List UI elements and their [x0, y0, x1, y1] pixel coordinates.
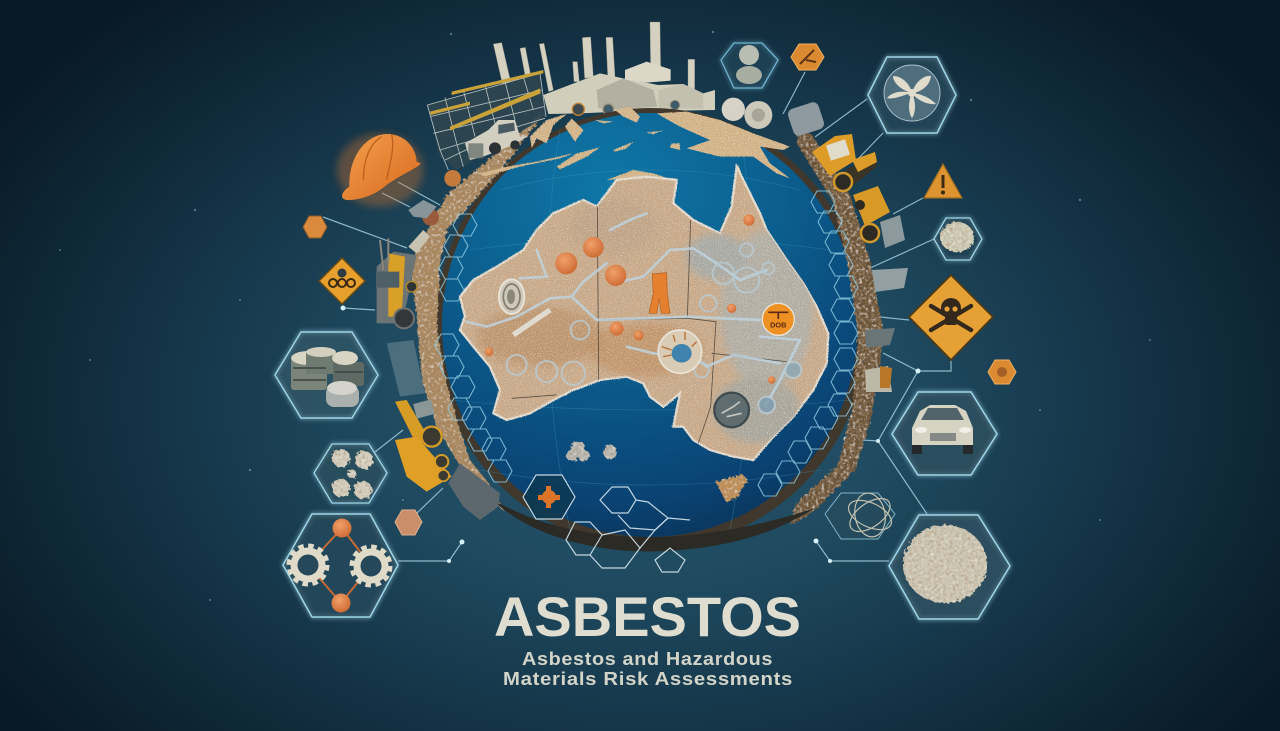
panel: atom-like fibre [825, 491, 896, 539]
icon: gear in bottom hexagon [538, 486, 560, 508]
globe [410, 108, 884, 572]
small hazard hexagon: right [988, 360, 1016, 384]
hexagon map rings [507, 243, 801, 413]
factory on the horizon [493, 22, 772, 129]
Australia landmass [460, 167, 828, 460]
left machinery [376, 170, 500, 520]
rim boulders [422, 209, 439, 226]
orange hazard badge: DOB [770, 321, 786, 330]
asbestos clumps in ocean [566, 441, 617, 462]
bottom hexagon cluster [523, 475, 690, 572]
sandy left rim [410, 112, 545, 512]
dump truck [853, 186, 890, 226]
globe rim [435, 108, 867, 548]
yellow loader top [812, 134, 856, 176]
right machinery [786, 101, 908, 392]
right hexagon mesh [758, 191, 858, 496]
grey machine block [448, 463, 500, 520]
excavator [395, 399, 452, 492]
ocean [442, 113, 858, 537]
panel: car [892, 392, 997, 475]
worker icon [649, 273, 670, 313]
state borders [512, 207, 787, 443]
white utility vehicle [465, 120, 528, 160]
orange fibre nodules [485, 214, 775, 384]
panel: fibre ball [934, 218, 982, 260]
skull and crossbones hazard sign [909, 275, 993, 360]
scaffolding [427, 70, 546, 170]
dark bottom rim [490, 498, 815, 551]
gas mask warning diamond [319, 258, 365, 304]
title: ASBESTOS [494, 585, 801, 648]
small hazard hexagon: top right [791, 44, 824, 70]
connector lines [323, 72, 951, 561]
orange hazard badge [762, 303, 794, 335]
panel: gears and nodes [283, 514, 398, 617]
title block [494, 585, 801, 689]
connector end dots [340, 306, 920, 563]
dark runner medallion [714, 393, 749, 427]
star specks [59, 31, 1151, 601]
yellow loader [376, 238, 417, 328]
panel: top face icon [721, 43, 778, 88]
map grid [450, 130, 850, 530]
panel: storage drums [275, 332, 378, 418]
subtitle line two: Materials Risk Assessments [503, 668, 793, 689]
brown right rim [790, 125, 884, 525]
hard hat [337, 133, 423, 207]
northern islands [480, 107, 790, 180]
small hazard hexagon: lower left [395, 510, 422, 535]
Tasmania [716, 474, 748, 502]
left hexagon mesh [435, 214, 512, 482]
subtitle line one: Asbestos and Hazardous [522, 648, 773, 669]
warning triangle [924, 164, 962, 198]
panel: fibre clusters [314, 444, 387, 503]
small hazard hexagon: worker face [303, 216, 327, 238]
stacked containers [786, 101, 826, 137]
magnified lake medallion [658, 330, 702, 373]
fingerprint medallion [499, 279, 550, 335]
panel: fan [868, 57, 956, 133]
raised network paths [467, 213, 800, 407]
ladder [387, 340, 425, 397]
panel: asbestos fibre ball [889, 515, 1010, 619]
